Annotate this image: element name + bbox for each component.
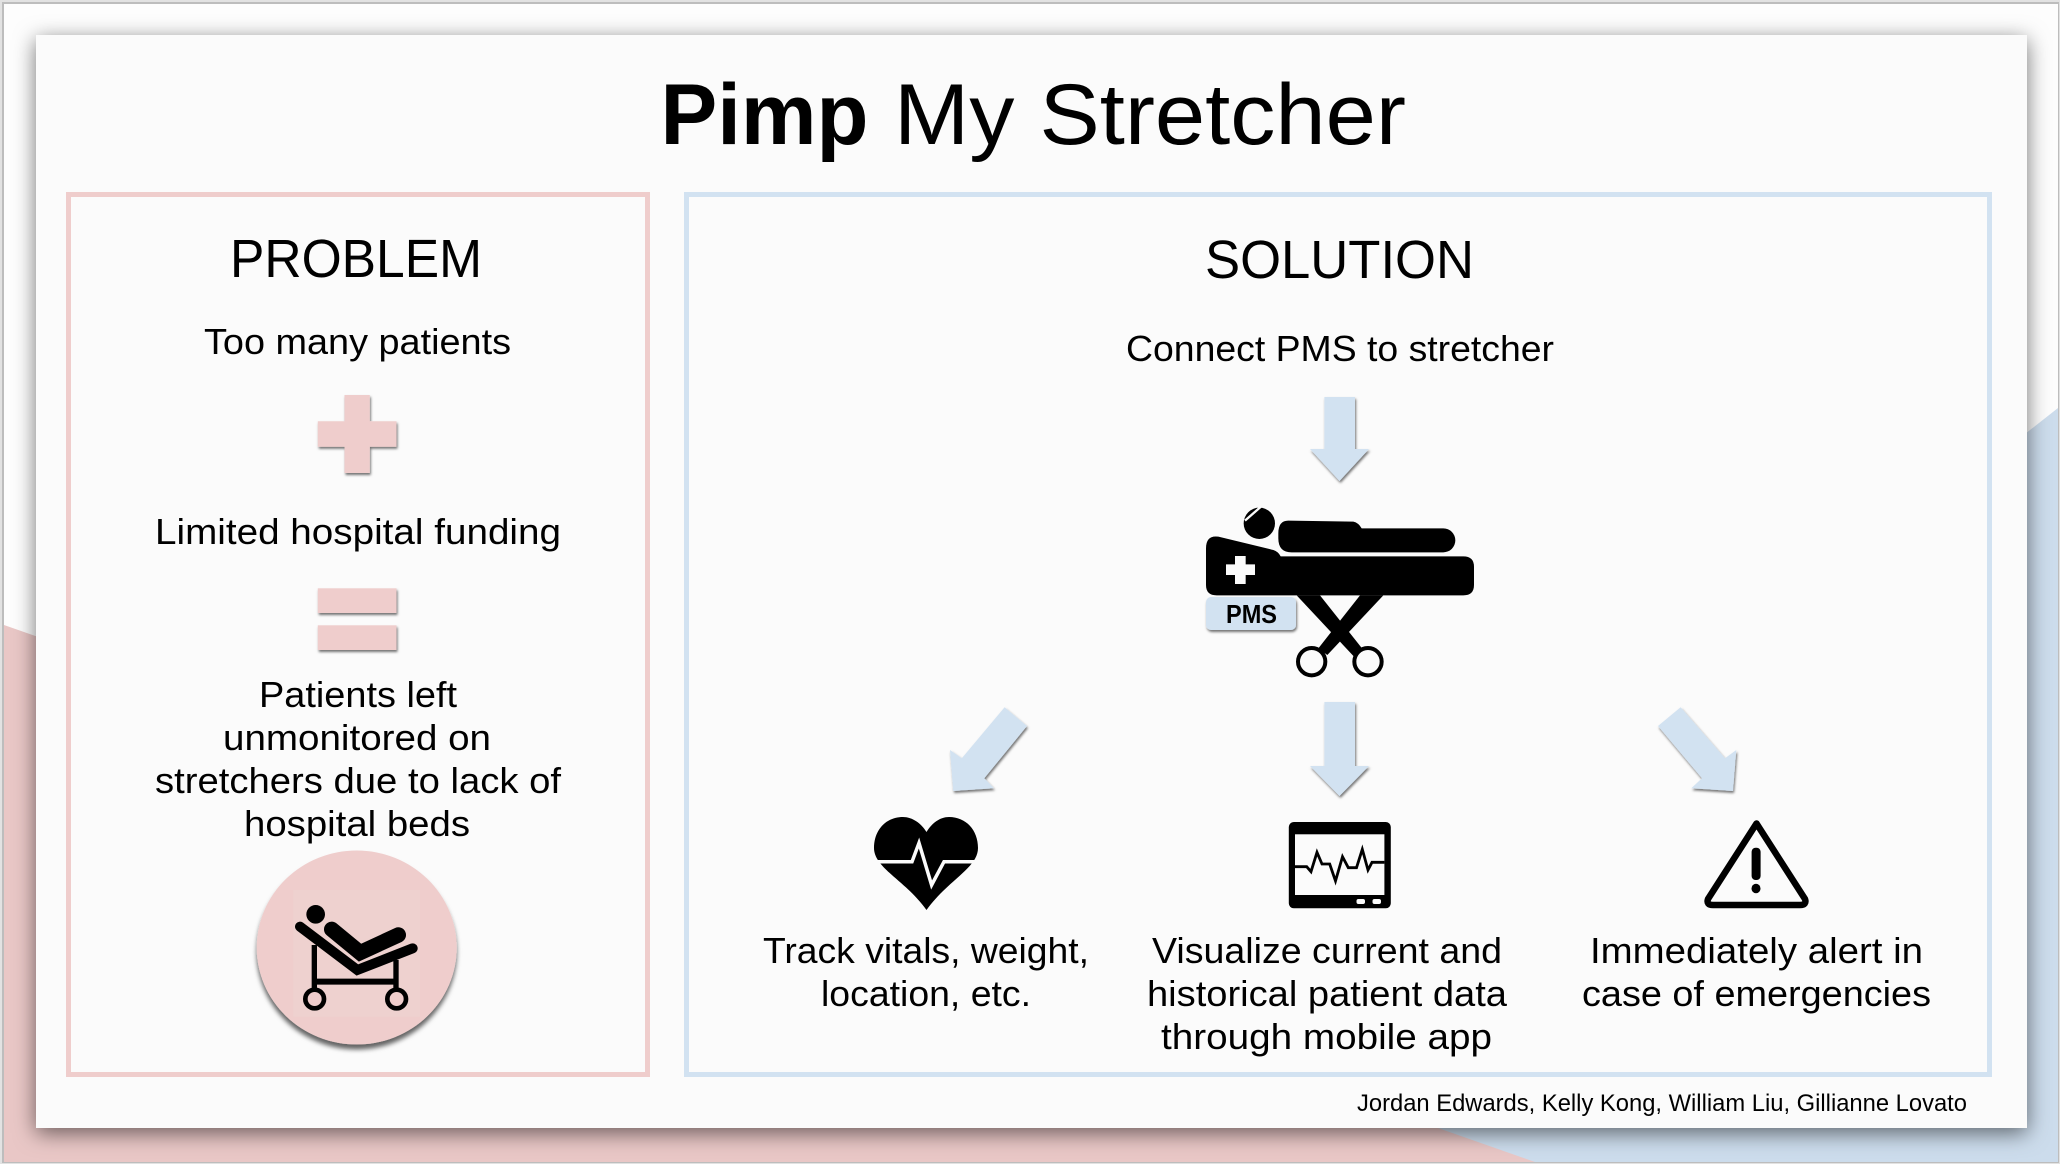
text: immediately alert: Immediately alert in — [1590, 930, 1923, 971]
icon: warning triangle — [1708, 824, 1805, 905]
icon: equals sign — [318, 588, 396, 650]
problem result text: stretchers due to lack of — [155, 760, 562, 801]
solution heading: SOLUTION — [1205, 230, 1474, 290]
text: immediately alert: case of emergencies — [1582, 973, 1931, 1014]
icon: plus sign — [318, 395, 396, 473]
solution panel border — [686, 194, 1990, 1074]
arrow: down-right to alert — [1658, 707, 1736, 791]
text: immediately alert — [1582, 930, 1931, 1014]
text: track vitals: location, etc. — [821, 973, 1031, 1014]
solution subheading: Connect PMS to stretcher — [1126, 328, 1554, 369]
panel: solution — [686, 194, 1990, 1074]
text: track vitals — [763, 930, 1089, 1014]
PMS tag — [1206, 597, 1296, 630]
problem result text — [155, 674, 562, 844]
text: track vitals: Track vitals, weight, — [763, 930, 1089, 971]
problem result text: Patients left — [259, 674, 457, 715]
title: My Stretcher — [894, 67, 1406, 163]
problem line: too many patients: Too many patients — [204, 321, 511, 362]
arrow: down-left to vitals — [950, 707, 1027, 791]
problem line: limited hospital funding: Limited hospital funding — [155, 511, 561, 552]
problem heading: PROBLEM — [230, 229, 482, 289]
icon: heart with pulse — [874, 817, 978, 910]
icon: stretcher with patient and PMS tag — [1206, 506, 1474, 675]
problem result text: hospital beds — [244, 803, 470, 844]
credits: Jordan Edwards, Kelly Kong, William Liu, Gillianne Lovato — [1357, 1090, 1967, 1117]
arrow: down to stretcher — [1310, 397, 1369, 481]
icon: patient on reclined bed in circle — [257, 850, 457, 1044]
text: visualize data — [1147, 930, 1508, 1057]
text: visualize data: historical patient data — [1147, 973, 1508, 1014]
icon: monitor with ECG — [1289, 822, 1391, 908]
text: visualize data: Visualize current and — [1152, 930, 1502, 971]
text: visualize data: through mobile app — [1161, 1016, 1492, 1057]
title — [660, 67, 1406, 163]
problem result text: unmonitored on — [223, 717, 491, 758]
problem panel border — [68, 194, 648, 1074]
title: Pimp — [660, 67, 868, 163]
PMS tag: PMS — [1226, 599, 1277, 629]
arrow: down to data — [1310, 702, 1369, 796]
panel: problem — [68, 194, 648, 1074]
